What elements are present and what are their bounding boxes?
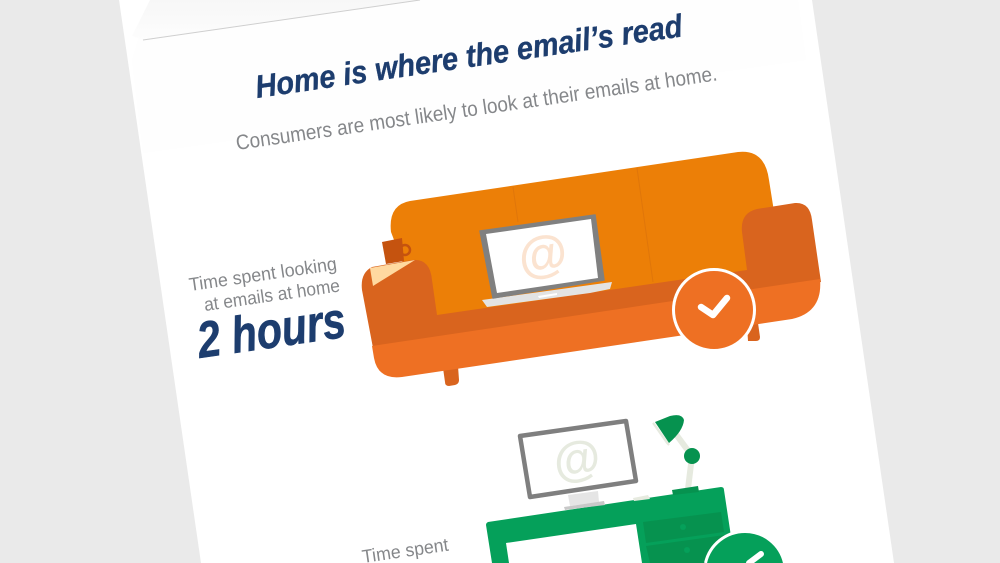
subtitle: Consumers are most likely to look at their emails at home. bbox=[234, 62, 719, 155]
illustration: orange sofa bbox=[362, 152, 821, 386]
check badge bbox=[674, 270, 754, 350]
check badge bbox=[706, 531, 784, 563]
desk pad bbox=[633, 495, 650, 501]
illustration: green desk bbox=[486, 415, 784, 563]
laptop bbox=[480, 215, 612, 307]
monitor bbox=[520, 421, 636, 510]
sofa seat and arms bbox=[362, 203, 821, 348]
sofa legs bbox=[443, 323, 760, 386]
sofa backrest bbox=[391, 152, 788, 352]
sofa base bbox=[372, 279, 820, 377]
monitor: @ bbox=[550, 430, 604, 489]
title: Home is where the email’s read bbox=[253, 7, 686, 105]
laptop: @ bbox=[515, 223, 571, 285]
cushion corner bbox=[370, 260, 415, 286]
desk lamp bbox=[653, 415, 700, 495]
desk opening bbox=[506, 524, 642, 563]
stat: home email time: at emails at home bbox=[203, 275, 341, 315]
drawers bbox=[643, 512, 729, 563]
coffee mug bbox=[382, 238, 410, 264]
panel: tilted page bbox=[119, 0, 894, 563]
stat: home email time: Time spent looking bbox=[188, 253, 338, 295]
stat: home email time bbox=[188, 253, 349, 369]
desk body bbox=[486, 487, 735, 563]
stat: home email time: 2 hours bbox=[193, 291, 349, 369]
